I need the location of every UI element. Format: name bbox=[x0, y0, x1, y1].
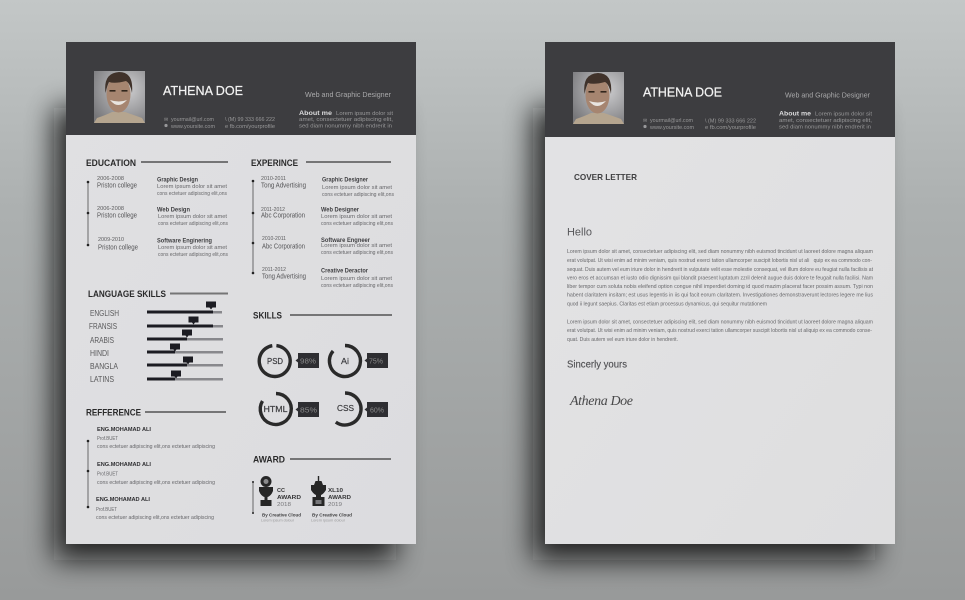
section: education: Lorem ipsum dolor sit amet bbox=[158, 214, 228, 220]
section: experience: Abc Corporation bbox=[261, 212, 305, 220]
section: reference: cons ectetuer adipiscing elit,ons ectetuer adipiscing bbox=[97, 480, 215, 486]
donut: PSD: PSD bbox=[267, 356, 283, 366]
letter paragraph 1 bbox=[567, 249, 874, 308]
about me bbox=[299, 110, 394, 130]
job title: Web and Graphic Designer bbox=[305, 90, 391, 99]
letter paper bbox=[545, 42, 895, 544]
section: education: Software Enginering bbox=[157, 238, 212, 244]
section: experience: 2011-2012 bbox=[261, 207, 285, 213]
section: language skills: BANGLA bbox=[90, 362, 119, 371]
section: experience: 2010-2011 bbox=[262, 236, 286, 242]
section: experience: Tong Advertising bbox=[261, 182, 306, 190]
donut: PSD: 98% bbox=[300, 358, 316, 366]
section: experience: cons ectetuer adipiscing elit,ons bbox=[321, 221, 394, 227]
about me bbox=[779, 110, 873, 130]
contact details: \ (M) 99 333 666 222 bbox=[225, 117, 275, 123]
contact details: e fb.com/yourprofile bbox=[705, 125, 756, 131]
contact details: yourmail@url.com bbox=[650, 118, 693, 124]
section: skills bbox=[253, 310, 392, 425]
section: experience: Creative Deractor bbox=[321, 268, 368, 274]
award 2 text: 2019 bbox=[328, 502, 342, 508]
donut: Ai bbox=[329, 346, 388, 376]
letter paragraph 1: quod ii legunt saepius. Claritas est etiam processus dynamicus, qui sequitur mutationem bbox=[567, 302, 767, 308]
donut: HTML: 85% bbox=[300, 408, 317, 414]
letter paragraph 1: vero eros et accumsan et iusto odio dignissim qui blandit praesent luptatum zzril delenit augue duis dolore te feugait nulla facilisi. Nam bbox=[567, 276, 873, 282]
section: education: 2009-2010 bbox=[98, 237, 124, 243]
contact details: ✉ bbox=[643, 118, 647, 124]
award 1 text: By Creative Cloud bbox=[262, 512, 301, 518]
section: experience: Tong Advertising bbox=[262, 274, 306, 280]
section: education: Priston college bbox=[98, 244, 138, 252]
section: education: Graphic Design bbox=[157, 176, 198, 184]
contact details: ✉ bbox=[164, 117, 168, 123]
contact details: \ (M) 99 333 666 222 bbox=[705, 118, 756, 124]
letter paragraph 1: habent claritatem insitam; est usus legentis in iis qui facit eorum claritatem. Investigationes demonstraverunt lectores legere me lius bbox=[567, 292, 873, 298]
cover letter heading: COVER LETTER bbox=[574, 172, 637, 182]
section: education: 2006-2008 bbox=[97, 206, 124, 212]
letter paragraph 2: Lorem ipsum dolor sit amet, consectetuer adipiscing elit, sed diam nonummy nibh euismod tincidunt ut laoreet dolore magna aliquam bbox=[567, 320, 873, 326]
section: experience: Lorem ipsum dolor sit amet bbox=[321, 214, 393, 220]
section: experience: Web Designer bbox=[321, 206, 359, 214]
donut: HTML: HTML bbox=[264, 404, 288, 414]
award 1 text: Lorem ipsum dolour bbox=[261, 518, 295, 522]
donut: PSD bbox=[259, 346, 319, 377]
contact details: yourmail@url.com bbox=[171, 117, 214, 123]
section: reference: cons ectetuer adipiscing elit,ons ectetuer adipiscing bbox=[96, 515, 214, 521]
section: reference: cons ectetuer adipiscing elit,ons ectetuer adipiscing bbox=[97, 444, 215, 450]
about me: amet, consectetuer adipiscing elit, bbox=[299, 117, 393, 123]
heading: SKILLS bbox=[253, 310, 282, 322]
section: language skills: ARABIS bbox=[90, 336, 114, 345]
profile photo bbox=[94, 71, 145, 123]
donut: CSS: 60% bbox=[370, 408, 384, 414]
section: award bbox=[252, 454, 391, 522]
heading: REFFERENCE bbox=[86, 408, 141, 418]
section: experience: Lorem ipsum dolor sit amet bbox=[321, 276, 393, 282]
contact details: www.yoursite.com bbox=[650, 125, 694, 131]
award 2 text: AWARD bbox=[328, 495, 351, 501]
about me: amet, consectetuer adipiscing elit, bbox=[779, 118, 872, 124]
section: education: cons ectetuer adipiscing elit,ons bbox=[157, 191, 227, 197]
about me: sed diam nonummy nibh endrerit in bbox=[779, 124, 871, 130]
section: education: cons ectetuer adipiscing elit,ons bbox=[158, 221, 228, 227]
section: education: Lorem ipsum dolor sit amet bbox=[158, 245, 228, 251]
greeting: Hello bbox=[567, 226, 592, 238]
resume header band bbox=[66, 42, 416, 135]
section: experience: Lorem ipsum dolor sit amet bbox=[322, 185, 393, 191]
about me: sed diam nonummy nibh endrerit in bbox=[299, 124, 392, 130]
section: language skills: ENGLISH bbox=[90, 309, 119, 318]
section: language skills: FRANSIS bbox=[89, 322, 117, 331]
letter header band bbox=[545, 42, 895, 137]
name: ATHENA DOE bbox=[163, 83, 243, 98]
closing: Sincerly yours bbox=[567, 360, 627, 370]
award 2 text bbox=[311, 488, 352, 522]
heading: AWARD bbox=[253, 454, 285, 466]
about me: Lorem ipsum dolor sit bbox=[815, 112, 873, 118]
section: reference: ENG.MOHAMAD ALI bbox=[97, 462, 151, 468]
job title: Web and Graphic Designer bbox=[785, 90, 870, 100]
award 2 text: By Creative Cloud bbox=[312, 512, 352, 518]
letter paragraph 1: Lorem ipsum dolor sit amet, consectetuer adipiscing elit, sed diam nonummy nibh euismod tincidunt ut laoreet dolore magna aliquam bbox=[567, 249, 873, 255]
heading: LANGUAGE SKILLS bbox=[88, 289, 166, 300]
section: education: cons ectetuer adipiscing elit,ons bbox=[158, 252, 228, 258]
award 1 text: AWARD bbox=[277, 495, 301, 501]
section: experience: Graphic Designer bbox=[322, 176, 368, 184]
section: experience: cons ectetuer adipiscing elit,ons bbox=[321, 283, 394, 289]
contact details: e fb.com/yourprofile bbox=[225, 124, 275, 130]
contact details bbox=[643, 118, 756, 131]
section: education: 2006-2008 bbox=[97, 176, 124, 182]
section: reference: ENG.MOHAMAD ALI bbox=[96, 497, 150, 503]
heading: EDUCATION bbox=[86, 158, 136, 169]
section: experience: Lorem ipsum dolor sit amet bbox=[321, 243, 393, 249]
award 1 text: CC bbox=[277, 488, 285, 494]
section: education: Priston college bbox=[97, 212, 137, 220]
section: experience: 2010-2011 bbox=[261, 176, 286, 182]
section: experience: 2011-2012 bbox=[262, 267, 286, 273]
section: reference: Prof.BUET bbox=[97, 436, 118, 442]
paper shadows bbox=[54, 108, 875, 560]
about me: About me bbox=[779, 110, 811, 118]
letter paragraph 2: quat. Duis autem vel eum iriure dolor in hendrerit. bbox=[567, 337, 678, 343]
panel: resume page bbox=[66, 42, 416, 544]
award 2 text: XL10 bbox=[328, 488, 343, 494]
section: reference: Prof.BUET bbox=[97, 472, 118, 478]
icon: trophy 1 bbox=[259, 476, 273, 506]
contact details: www.yoursite.com bbox=[171, 124, 215, 130]
award 1 text bbox=[261, 488, 301, 522]
section: language skills: LATINS bbox=[90, 375, 114, 384]
section: experience: Abc Corporation bbox=[262, 244, 305, 250]
about me: Lorem ipsum dolor sit bbox=[336, 111, 394, 117]
donut: CSS bbox=[336, 393, 388, 425]
donut: Ai: 75% bbox=[369, 358, 383, 366]
section: education: Web Design bbox=[157, 206, 190, 214]
section: language skills bbox=[88, 289, 228, 384]
section: education: Lorem ipsum dolor sit amet bbox=[157, 184, 228, 190]
section: reference bbox=[86, 408, 226, 521]
panel: cover letter page bbox=[545, 42, 895, 544]
section: education: Priston college bbox=[97, 182, 137, 190]
name: ATHENA DOE bbox=[643, 84, 722, 100]
about me: About me bbox=[299, 110, 332, 117]
icon: trophy 2 bbox=[311, 476, 326, 506]
language bars bbox=[147, 311, 223, 380]
letter paragraph 1: erat volutpat. Ut wisi enim ad minim veniam, quis nostrud exerci tation ullamcorper suscipit lobortis nisl ut ali quip ex ea commodo con- bbox=[567, 258, 872, 264]
donut: CSS: CSS bbox=[337, 403, 354, 413]
letter paragraph 2 bbox=[567, 320, 873, 343]
section: experience: cons ectetuer adipiscing elit,ons bbox=[322, 192, 395, 198]
donut: Ai: Ai bbox=[341, 356, 349, 366]
signature: Athena Doe bbox=[569, 394, 633, 409]
heading: EXPERINCE bbox=[251, 158, 298, 169]
section: experience: Software Engneer bbox=[321, 237, 370, 244]
contact details bbox=[164, 117, 275, 130]
award 2 text: Lorem ipsum dolour bbox=[311, 518, 346, 522]
resume paper bbox=[66, 42, 416, 544]
donut: HTML bbox=[260, 394, 319, 424]
section: experience: cons ectetuer adipiscing elit,ons bbox=[321, 250, 394, 256]
section: experience bbox=[251, 158, 395, 289]
section: education bbox=[86, 158, 228, 258]
section: reference: Prof.BUET bbox=[96, 507, 117, 513]
section: language skills: HINDI bbox=[90, 349, 109, 358]
letter paragraph 1: sequat. Duis autem vel eum iriure dolor in hendrerit in vulputate velit esse molestie consequat, vel illum dolore eu feugiat nulla facilisis at bbox=[567, 267, 874, 273]
award 1 text: 2018 bbox=[277, 502, 291, 508]
letter paragraph 1: liber tempor cum soluta nobis eleifend option congue nihil imperdiet doming id quod mazim placerat facer possim assum. Typi non bbox=[567, 284, 873, 290]
section: reference: ENG.MOHAMAD ALI bbox=[97, 427, 151, 433]
letter paragraph 2: erat volutpat. Ut wisi enim ad minim veniam, quis nostrud exerci tation ullamcorper suscipit lobortis nisl ut aliquip ex ea commodo conse- bbox=[567, 328, 872, 334]
profile photo bbox=[573, 72, 624, 124]
